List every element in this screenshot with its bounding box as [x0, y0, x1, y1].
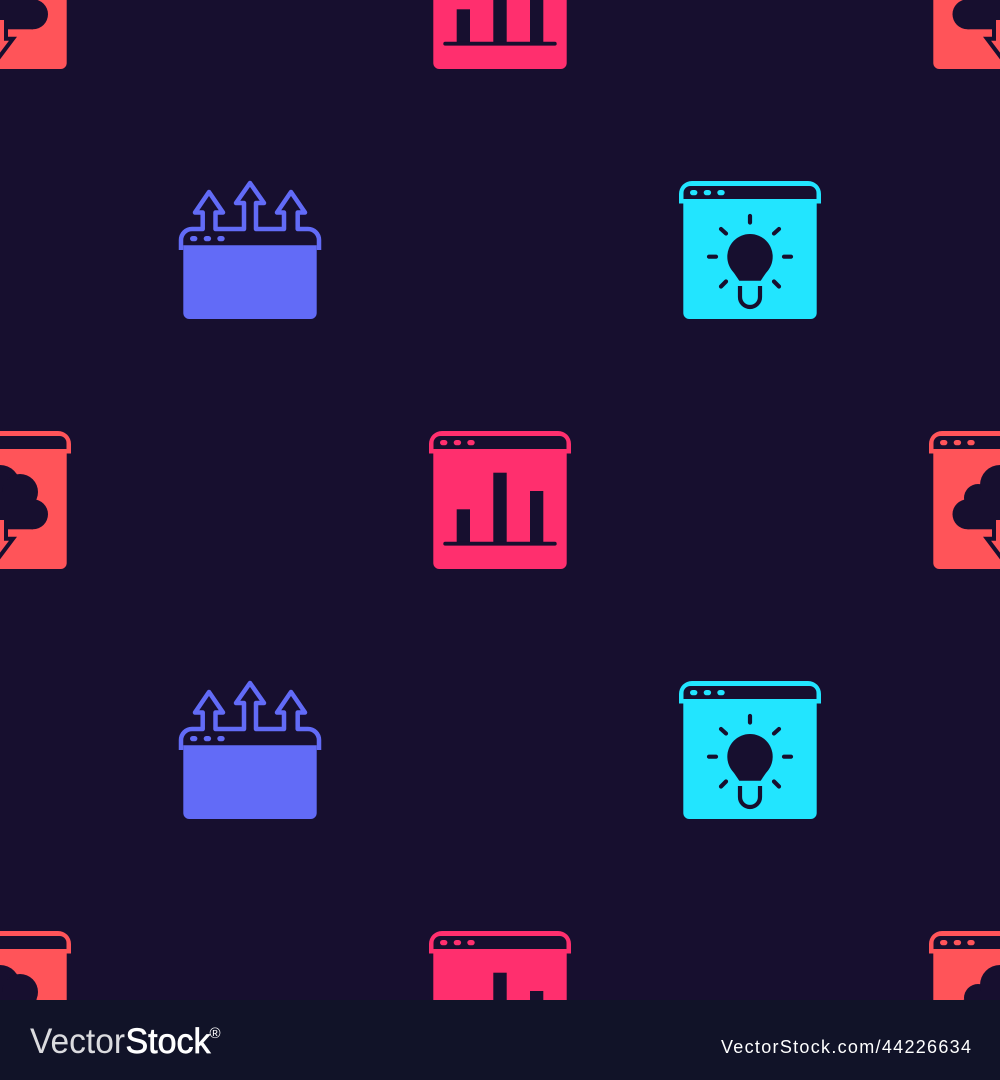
- footer bar: [0, 1000, 1000, 1080]
- logo: VectorStock: Vector: [30, 1022, 125, 1061]
- icon: upload arrows window, lower left: [181, 683, 319, 819]
- icon: bar chart window, centre: [429, 431, 571, 569]
- logo: VectorStock: [30, 1022, 221, 1061]
- icon: cloud download window, bottom right: [929, 931, 1000, 1069]
- image id url: VectorStock.com/44226634: [721, 1037, 971, 1057]
- icon: cloud download window, middle left: [0, 431, 71, 569]
- logo: VectorStock: Stock: [126, 1022, 211, 1061]
- icon: cloud download window, middle right: [929, 431, 1000, 569]
- icon: bar chart window, bottom centre: [429, 931, 571, 1069]
- icon: upload arrows window, upper left: [181, 183, 319, 319]
- icon: bar chart window, top centre: [429, 0, 571, 69]
- icon: cloud download window, top right: [929, 0, 1000, 69]
- icon: light bulb window, lower right: [679, 681, 821, 819]
- icon: cloud download window, top left: [0, 0, 71, 69]
- icon: cloud download window, bottom left: [0, 931, 71, 1069]
- logo: VectorStock: ®: [210, 1025, 221, 1042]
- icon: light bulb window, upper right: [679, 181, 821, 319]
